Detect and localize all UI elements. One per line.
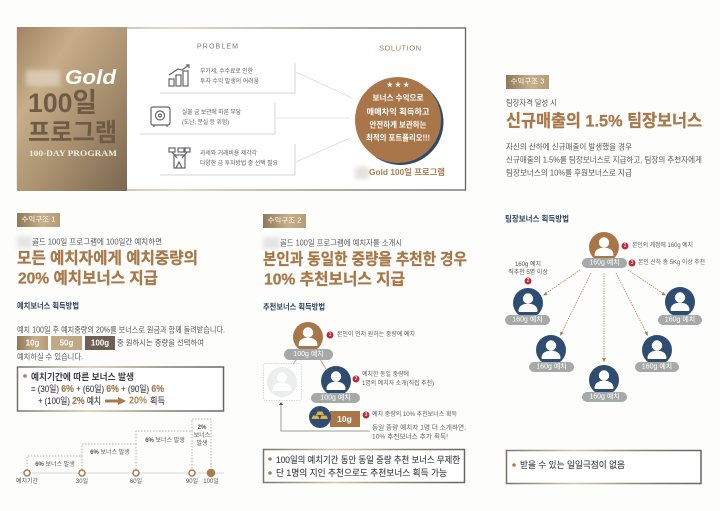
step 3: 본인 산하 총 5Kg 이상 추천 — [638, 258, 705, 266]
referred person — [311, 366, 360, 403]
icon: tax and choices — [169, 148, 190, 168]
callout: bonus by period: 20% — [129, 396, 147, 406]
step 3: 3 — [365, 412, 368, 418]
timeline chart: 예치기간 — [16, 477, 39, 485]
heading: 모든 예치자에게 예치중량의 — [17, 250, 198, 268]
heading — [263, 250, 467, 288]
heading — [17, 250, 198, 288]
step 2: 1명의 예치자 소개(직접 추천) — [362, 379, 434, 387]
problem row 3 — [160, 144, 295, 175]
step 3 — [628, 258, 705, 266]
callout: bonus by period — [18, 367, 224, 411]
referral diagram — [264, 322, 466, 440]
panel: income structure 1 — [16, 213, 225, 485]
solution heading: SOLUTION — [379, 44, 421, 52]
badge — [506, 75, 549, 89]
description: 팀장보너스의 10%를 후원보너스로 지급 — [506, 168, 632, 178]
step 2: 직추천 5명 이상 — [508, 268, 548, 276]
step 1 — [622, 241, 693, 250]
icon: rising coins — [169, 65, 189, 86]
team diagram — [505, 232, 705, 402]
description — [506, 142, 702, 178]
member 3: 160g 예치 — [589, 392, 620, 400]
timeline chart: 6% 보너스 발생 — [145, 436, 185, 444]
timeline chart: 6% 보너스 발생 — [90, 448, 130, 456]
top person: 160g 예치 — [589, 258, 620, 266]
step 2 — [508, 260, 548, 284]
referrer person: 100g 예치 — [293, 349, 324, 358]
panel: income structure 3 — [505, 75, 705, 484]
step 1: 1 — [624, 243, 627, 249]
gold title panel: 100-DAY PROGRAM — [29, 148, 117, 158]
member 2: 160g 예치 — [536, 362, 567, 370]
member 3 — [582, 365, 627, 402]
referred person: 100g 예치 — [320, 392, 351, 402]
step 1: 본인이 먼저 원하는 중량에 예치 — [337, 330, 415, 338]
problem row 3: 다양한 금 투자방법 중 선택 필요 — [200, 159, 278, 167]
callout: referral summary: 단 1명의 지인 추천으로도 추천보너스 획득 가능 — [276, 467, 447, 478]
step 3: 예치 중량의 10% 추천보너스 획득 — [372, 410, 457, 418]
solution circle: 보너스 수익으로 — [372, 92, 424, 102]
weight chips: 50g — [60, 338, 74, 348]
arrow — [105, 397, 126, 405]
solution circle: ★ ★ ★ — [386, 82, 410, 88]
problem row 2 — [140, 103, 275, 134]
callout: referral summary — [264, 450, 464, 482]
solution circle: 최적의 포트폴리오!!! — [366, 132, 430, 142]
solution circle: 매매차익 획득하고 — [366, 106, 430, 116]
callout: bonus by period: 예치기간에 따른 보너스 발생 — [31, 371, 134, 382]
heading: 10% 추천보너스 지급 — [264, 270, 405, 288]
member 5 — [658, 287, 702, 325]
return arrow — [279, 402, 370, 431]
panel: income structure 1: 중 원하시는 중량을 선택하여 — [117, 338, 204, 348]
timeline chart — [16, 419, 224, 485]
weight chips — [17, 336, 115, 350]
problem row 3: 과세와 거래비용 제각각 — [200, 149, 257, 157]
callout: bonus by period: 획득 — [150, 395, 165, 406]
step 3: 3 — [631, 260, 634, 266]
callout: bonus by period: = (30일) 6% + (60일) 6% + (90일) 6% — [31, 384, 164, 394]
timeline chart: 30일 — [76, 477, 88, 485]
badge — [17, 213, 60, 227]
description: 신규매출의 1.5%를 팀장보너스로 지급하고, 팀장의 추천자에게 — [506, 154, 702, 164]
step 2: 160g 예치 — [515, 260, 541, 268]
arrows from problems to solution — [276, 72, 352, 162]
member 4: 160g 예치 — [642, 362, 672, 370]
problem row 1: 부가세, 수수료로 인한 — [200, 67, 253, 75]
gold title panel: 100일 — [28, 88, 97, 118]
timeline chart: 60일 — [130, 477, 142, 485]
member 1: 160g 예치 — [512, 314, 543, 324]
problem heading: PROBLEM — [197, 44, 238, 50]
timeline chart: 100일 — [203, 477, 219, 485]
heading: 20% 예치보너스 지급 — [18, 270, 158, 288]
member 5: 160g 예치 — [665, 314, 695, 324]
gold title panel: Gold — [65, 67, 117, 89]
problem row 2: 실물 금 보관에 따른 부담 — [182, 108, 241, 116]
solution circle: 안전하게 보관하는 — [370, 120, 427, 130]
gold reward 10g — [309, 406, 360, 428]
problem row 1 — [160, 63, 295, 93]
step 2: 예치한 동일 중량에 — [362, 370, 409, 378]
subheading: 추천보너스 획득방법 — [263, 302, 325, 312]
weight chips: 10g — [26, 338, 40, 348]
subheading: 팀장보너스 획득방법 — [505, 214, 569, 224]
timeline chart: 6% 보너스 발생 — [35, 460, 75, 468]
description: 자신의 산하에 신규매출이 발생했을 경우 — [506, 142, 632, 152]
step 3 — [362, 410, 457, 418]
referrer person — [284, 322, 333, 360]
badge: 수익구조 3 — [510, 78, 545, 86]
heading: 본인과 동일한 중량을 추천한 경우 — [263, 250, 467, 268]
timeline chart: 보너스 — [194, 431, 211, 439]
badge — [263, 214, 306, 228]
solution circle — [355, 77, 444, 165]
description: 예치 100일 후 예치중량의 20%를 보너스로 원금과 함께 돌려받습니다. — [17, 324, 225, 334]
ghost person box — [264, 364, 302, 400]
step 1: 1 — [329, 332, 332, 338]
heading: 신규매출의 1.5% 팀장보너스 — [506, 112, 702, 130]
step 1: 본인의 계정에 160g 예치 — [632, 241, 693, 249]
timeline chart: 2% — [198, 425, 207, 431]
subheading: 예치보너스 획득방법 — [17, 300, 79, 310]
icon: gold bars — [312, 412, 328, 419]
arrows — [545, 270, 664, 360]
solution program name: Gold 100일 프로그램 — [369, 167, 445, 177]
intro line: 골드 100일 프로그램에 100일간 예치하면 — [32, 236, 162, 246]
intro line: 골드 100일 프로그램에 예치자를 소개시 — [280, 238, 402, 248]
callout: referral summary: 100일의 예치기간 동안 동일 중량 추천 보너스 무제한 — [276, 454, 460, 465]
step 2: 2 — [355, 376, 358, 382]
panel: income structure 2 — [263, 214, 467, 482]
member 1 — [505, 288, 550, 325]
top person — [582, 232, 627, 268]
weight chips: 100g — [91, 338, 109, 348]
callout: no daily limit: 받을 수 있는 일일극점이 없음 — [520, 459, 625, 470]
timeline chart: 발생 — [196, 439, 208, 447]
gold reward 10g: 10g — [337, 414, 352, 424]
gold title panel: 프로그램 — [28, 119, 117, 147]
solution program name — [355, 167, 445, 179]
badge: 수익구조 2 — [268, 216, 302, 224]
problem row 2: (도난, 분실 등 위험) — [182, 118, 229, 126]
panel: income structure 1: 예치하실 수 있습니다. — [17, 352, 83, 362]
repeat note: 10% 추천보너스 추가 획득! — [372, 432, 448, 440]
repeat note — [372, 422, 466, 440]
member 2 — [529, 335, 574, 372]
banner frame — [18, 28, 466, 190]
repeat note: 동일 중량 예치자 1명 더 소개하면, — [372, 422, 466, 432]
member 4 — [635, 335, 679, 372]
callout: no daily limit — [506, 450, 701, 484]
intro line: 팀장자격 달성 시 — [506, 98, 557, 108]
icon: safe — [151, 107, 170, 127]
step 2 — [352, 370, 434, 387]
step 2: 2 — [527, 278, 530, 284]
problem row 1: 투자 수익 발생의 어려움 — [200, 77, 259, 85]
timeline chart: 90일 — [186, 477, 198, 485]
top banner panel — [17, 27, 466, 191]
callout: bonus by period: + (100일) 2% 예치 — [38, 395, 101, 406]
step 1 — [326, 330, 415, 338]
badge: 수익구조 1 — [22, 216, 56, 224]
gold title panel — [17, 27, 127, 191]
